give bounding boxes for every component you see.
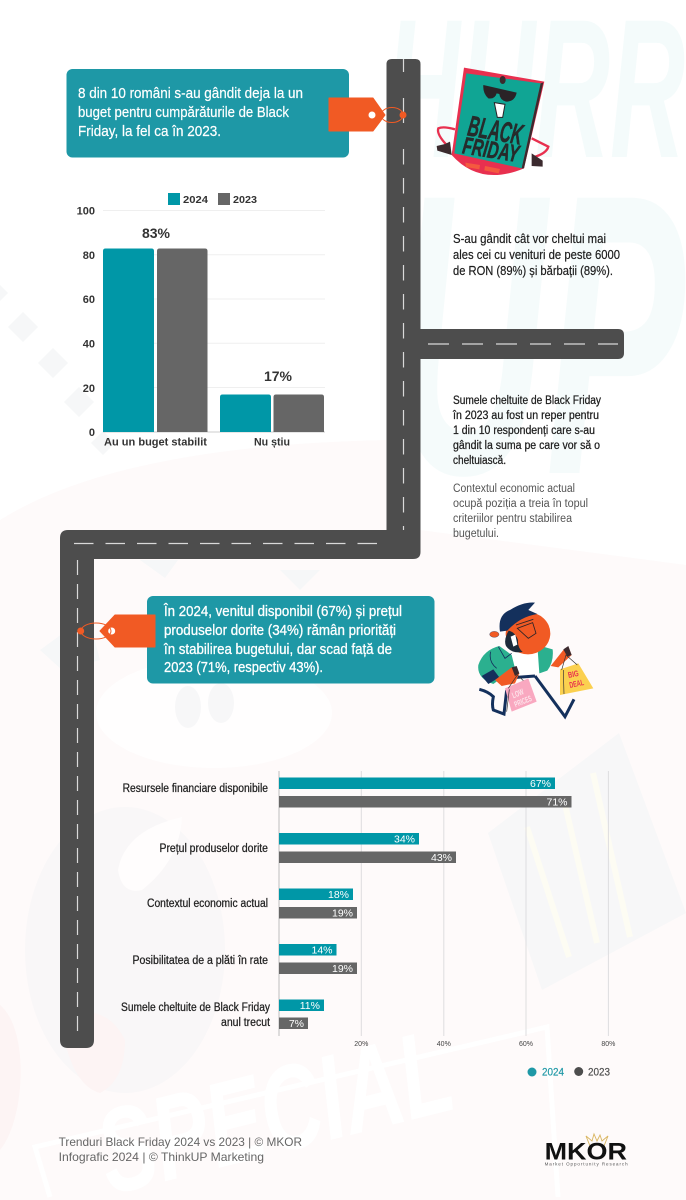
category labels: Sumele cheltuite de Black Friday <box>121 1002 270 1014</box>
category labels: Resursele financiare disponibile <box>123 783 268 795</box>
value labels: 19% <box>332 963 353 975</box>
callout: 8 din 10 romani: buget pentru cumpărăturile de Black <box>78 104 289 121</box>
icon: shopper character: BIG <box>567 668 580 680</box>
legend: budget chart <box>168 193 257 206</box>
callout: venit disponibil: În 2024, venitul disponibil (67%) și prețul <box>163 603 402 620</box>
icon: shopper character <box>478 603 593 717</box>
value labels: 71% <box>546 796 568 808</box>
bar chart: budget: 100 <box>77 206 95 218</box>
bar chart: budget: Au un buget stabilit <box>104 436 207 448</box>
category labels <box>121 783 271 1029</box>
bar chart: budget: 83% <box>142 225 171 241</box>
callout: venit disponibil: produselor dorite (34%) rămân priorități <box>164 623 396 639</box>
footer text: Infografic 2024 | © ThinkUP Marketing <box>59 1150 264 1164</box>
callout: venit disponibil <box>147 596 434 684</box>
value labels: 67% <box>530 778 551 790</box>
text block: amounts spent: 1 din 10 respondenți care s-au <box>453 425 595 437</box>
icon: price tag lower <box>77 615 155 647</box>
icon: price tag top <box>329 98 406 131</box>
legend: budget chart: 2023 <box>233 194 257 206</box>
text block: income: de RON (89%) și bărbații (89%). <box>453 264 613 278</box>
bars <box>279 778 572 1029</box>
value labels: 19% <box>332 908 353 920</box>
text block: income <box>453 232 620 278</box>
value labels: 43% <box>431 852 452 864</box>
road <box>60 59 624 1048</box>
text block: economic context: ocupă poziția a treia în topul <box>453 498 588 510</box>
bar chart: budget: 20 <box>83 383 95 395</box>
value labels: 11% <box>300 1000 320 1012</box>
text block: amounts spent <box>452 395 601 467</box>
bar chart: budget <box>77 193 325 448</box>
callout: 8 din 10 romani <box>66 69 349 158</box>
text block: amounts spent: cheltuiască. <box>453 455 506 467</box>
axis labels: 80% <box>601 1041 615 1048</box>
bar chart: budget: 80 <box>83 250 95 262</box>
category labels: anul trecut <box>221 1017 271 1029</box>
icon: Black Friday phone character <box>437 68 548 175</box>
value labels: 18% <box>328 889 349 901</box>
category labels: Contextul economic actual <box>147 898 268 910</box>
axis labels <box>354 1041 615 1048</box>
value labels: 34% <box>394 834 415 846</box>
text block: income: ales cei cu venituri de peste 6000 <box>453 248 620 262</box>
text block: amounts spent: în 2023 au fost un reper pentru <box>452 410 599 422</box>
bar chart: budget: 40 <box>83 338 95 350</box>
text block: economic context: Contextul economic actual <box>453 483 575 495</box>
icon: shopper character: LOW <box>510 686 525 700</box>
category labels: Posibilitatea de a plăti în rate <box>132 955 268 967</box>
axis labels: 40% <box>437 1041 451 1048</box>
callout: venit disponibil: 2023 (71%, respectiv 43%). <box>164 660 323 676</box>
text block: amounts spent: Sumele cheltuite de Black Friday <box>453 395 601 407</box>
icon: Black Friday phone character: FRIDAY <box>461 133 522 168</box>
footer text <box>59 1135 302 1164</box>
icon: shopper character: DEAL <box>568 677 585 690</box>
bar chart: budget: 17% <box>264 368 293 384</box>
logo: MKOR: Market Opportunity Research <box>545 1162 628 1166</box>
footer text: Trenduri Black Friday 2024 vs 2023 | © MKOR <box>59 1135 302 1149</box>
icon: Black Friday phone character: BLACK <box>465 111 526 152</box>
logo: MKOR: MKOR <box>545 1138 627 1166</box>
text block: economic context <box>453 483 588 540</box>
value labels <box>289 778 568 1030</box>
axis labels: 60% <box>519 1041 533 1048</box>
callout: venit disponibil: în stabilirea bugetului, dar scad față de <box>163 642 392 658</box>
text block: income: S-au gândit cât vor cheltui mai <box>453 232 606 246</box>
category labels: Prețul produselor dorite <box>160 843 268 855</box>
legend: budget chart: 2024 <box>183 194 208 206</box>
icon: shopper character: PRICES <box>513 693 533 709</box>
text block: amounts spent: gândit la suma pe care vor să o <box>453 440 600 452</box>
horizontal bar chart: criteria <box>121 771 615 1048</box>
bar chart: budget: 60 <box>83 294 95 306</box>
legend: criteria chart: 2024 <box>542 1066 564 1078</box>
bar chart: budget: 0 <box>89 427 95 439</box>
callout: 8 din 10 romani: Friday, la fel ca în 2023. <box>78 123 221 140</box>
legend: criteria chart: 2023 <box>588 1066 610 1078</box>
value labels: 7% <box>289 1018 304 1030</box>
legend: criteria chart <box>528 1066 610 1078</box>
value labels: 14% <box>311 944 332 956</box>
text block: economic context: bugetului. <box>453 528 499 540</box>
axis labels: 20% <box>354 1041 368 1048</box>
text block: economic context: criteriilor pentru stabilirea <box>453 513 573 525</box>
bar chart: budget: Nu știu <box>254 436 290 448</box>
callout: 8 din 10 romani: 8 din 10 români s-au gândit deja la un <box>78 85 303 102</box>
